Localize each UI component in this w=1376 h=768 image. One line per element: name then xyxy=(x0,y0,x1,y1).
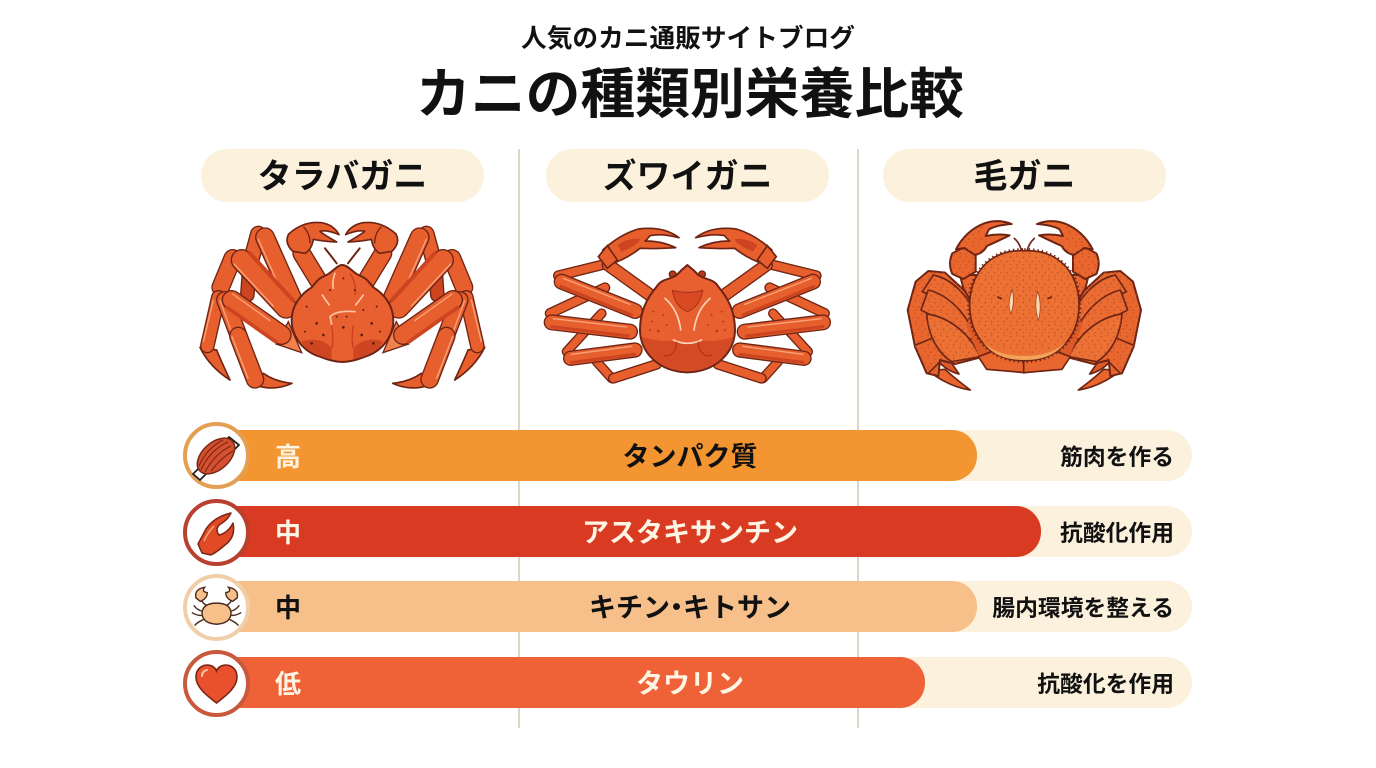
level label: 高 xyxy=(275,442,301,472)
level bar: medium xyxy=(216,581,977,632)
column divider left xyxy=(518,149,520,728)
effect label: 筋肉を作る xyxy=(1060,444,1174,470)
effect label: 腸内環境を整える xyxy=(992,595,1174,621)
effect label: 抗酸化作用 xyxy=(1060,520,1174,546)
subtitle: 人気のカニ通販サイトブログ xyxy=(521,25,855,53)
level bar: low xyxy=(216,657,925,708)
icon: muscle xyxy=(183,422,250,489)
row track xyxy=(216,657,1192,708)
title: カニの種類別栄養比較 xyxy=(416,63,964,125)
row track xyxy=(216,581,1192,632)
row: protein xyxy=(183,422,1192,489)
illustration: hairy crab xyxy=(906,220,1142,391)
nutrient name: タンパク質 xyxy=(622,442,758,472)
illustration: king crab xyxy=(199,222,486,389)
row: taurine xyxy=(183,650,1192,717)
nutrient name: アスタキサンチン xyxy=(582,518,798,548)
effect label: 抗酸化を作用 xyxy=(1037,671,1174,697)
column divider right xyxy=(857,149,858,728)
column heading: 毛ガニ xyxy=(883,149,1166,202)
level label: 低 xyxy=(275,669,301,699)
level bar: high xyxy=(216,430,977,481)
nutrient name: キチン・キトサン xyxy=(589,593,791,623)
level label: 中 xyxy=(275,518,301,548)
icon: heart xyxy=(183,650,250,717)
column heading: タラバガニ: タラバガニ xyxy=(258,158,427,196)
column heading: タラバガニ xyxy=(201,149,484,202)
level label: 中 xyxy=(275,593,301,623)
row: chitin and chitosan xyxy=(183,574,1192,641)
illustration: snow crab xyxy=(544,228,831,384)
column heading: 毛ガニ: 毛ガニ xyxy=(974,158,1076,196)
column heading: ズワイガニ xyxy=(546,149,829,202)
row track xyxy=(216,506,1192,557)
row track xyxy=(216,430,1192,481)
row: astaxanthin xyxy=(183,499,1192,566)
icon: crab claw xyxy=(183,499,250,566)
level bar: medium xyxy=(216,506,1041,557)
nutrient name: タウリン xyxy=(636,669,744,699)
column heading: ズワイガニ: ズワイガニ xyxy=(602,158,772,196)
icon: small crab xyxy=(183,574,250,641)
